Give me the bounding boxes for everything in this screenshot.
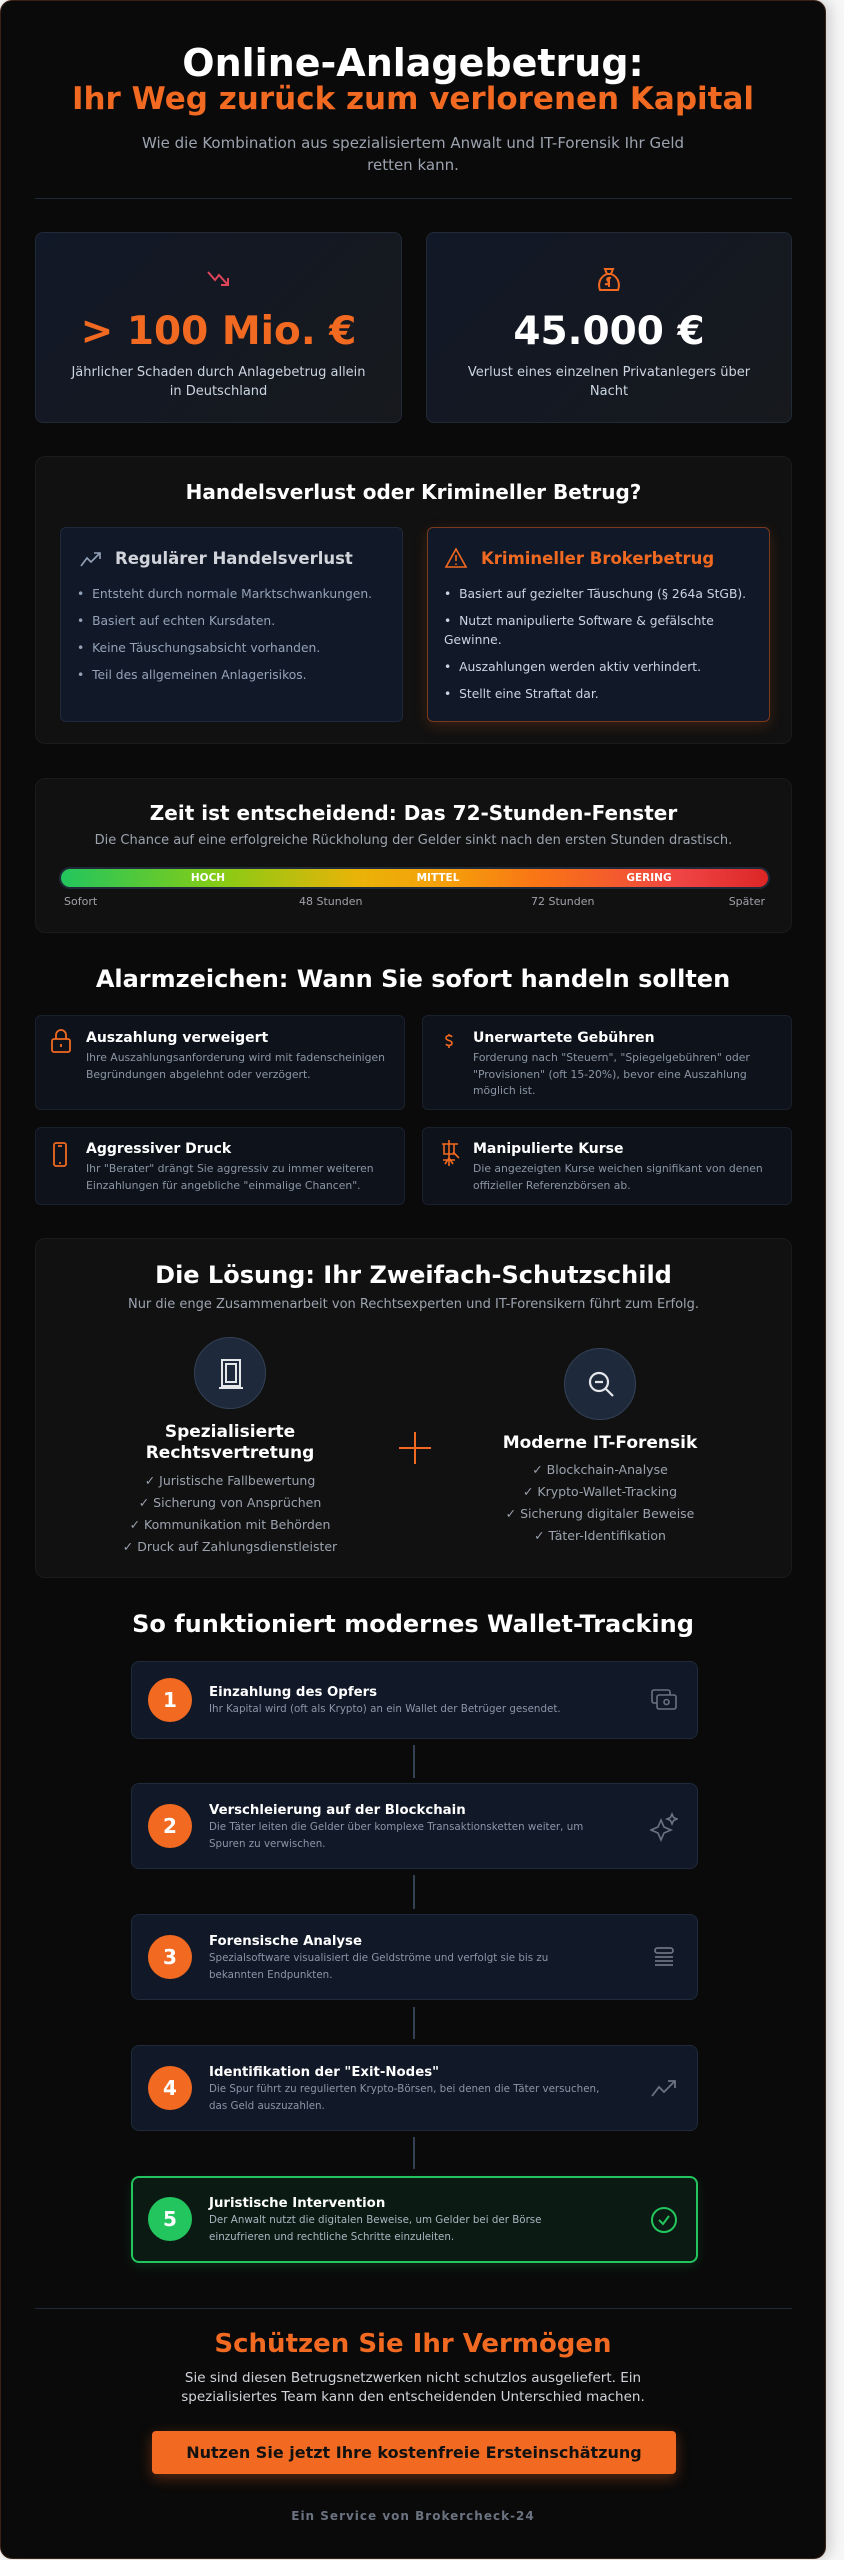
step 5: Juristische Intervention [209, 2196, 385, 2211]
alarm card: manipulated prices: Manipulierte Kurse [473, 1141, 624, 1157]
icon: legal [194, 1337, 266, 1409]
connector [413, 2137, 415, 2169]
column: forensics [503, 1348, 698, 1543]
step 1 [131, 1661, 698, 1739]
CTA text [181, 2370, 645, 2405]
icon: plus [399, 1432, 431, 1464]
subheading: Nur die enge Zusammenarbeit von Rechtsexperten und IT-Forensikern führt zum Erfolg. [128, 1297, 699, 1312]
stat card: individual loss [426, 232, 792, 423]
alarm card: manipulated prices: Die angezeigten Kurse weichen signifikant von denen [473, 1162, 763, 1175]
tick labels: Später [729, 895, 765, 908]
CTA text: Sie sind diesen Betrugsnetzwerken nicht schutzlos ausgeliefert. Ein [185, 2370, 641, 2386]
step 3: Spezialsoftware visualisiert die Geldströme und verfolgt sie bis zu [209, 1952, 548, 1964]
icon: magnifier [564, 1348, 636, 1420]
step 4: das Geld auszuzahlen. [209, 2100, 325, 2112]
alarm card: payout refused: Begründungen abgelehnt oder verzögert. [86, 1068, 311, 1081]
card: regular loss: • Keine Täuschungsabsicht vorhanden. [77, 641, 320, 655]
caption: Nacht [590, 384, 628, 399]
card heading: Regulärer Handelsverlust [115, 549, 353, 568]
step 1: Einzahlung des Opfers [209, 1685, 377, 1700]
step 1: Ihr Kapital wird (oft als Krypto) an ein Wallet der Betrüger gesendet. [209, 1703, 561, 1715]
connector [413, 2007, 415, 2039]
alarm card: pressure [35, 1127, 405, 1205]
column: legal: ✓ Juristische Fallbewertung [145, 1473, 315, 1488]
step 2: Spuren zu verwischen. [209, 1838, 326, 1850]
intro text: Wie die Kombination aus spezialisiertem Anwalt und IT-Forensik Ihr Geld [142, 134, 684, 152]
panel: comparison [35, 456, 792, 744]
intro text [142, 134, 684, 174]
CTA heading: Schützen Sie Ihr Vermögen [214, 2329, 612, 2359]
CTA button [152, 2431, 676, 2474]
tick labels: 72 Stunden [531, 895, 594, 908]
alarm card: fees: Unerwartete Gebühren [473, 1030, 655, 1046]
card: criminal fraud: • Stellt eine Straftat dar. [444, 687, 599, 701]
alarm card: pressure: Aggressiver Druck [86, 1141, 231, 1157]
alarm card: pressure: Ihr "Berater" drängt Sie aggressiv zu immer weiteren [86, 1162, 374, 1175]
panel: 72 hour window [35, 778, 792, 933]
gradient bar [61, 869, 768, 887]
step 3 [131, 1914, 698, 2000]
alarm card: pressure: Einzahlungen für angebliche "einmalige Chancen". [86, 1179, 361, 1192]
CTA text: spezialisiertes Team kann den entscheidenden Unterschied machen. [181, 2389, 645, 2405]
icon: money bag [598, 268, 620, 291]
connector [413, 1875, 415, 1909]
intro text: retten kann. [367, 156, 459, 174]
caption [70, 365, 366, 399]
panel: solution [35, 1238, 792, 1578]
column: forensics: ✓ Sicherung digitaler Beweise [506, 1506, 694, 1521]
alarm card: payout refused: Auszahlung verweigert [86, 1030, 268, 1046]
column: legal: ✓ Druck auf Zahlungsdienstleister [123, 1539, 337, 1554]
gradient bar: MITTEL [417, 872, 459, 884]
title: Online-Anlagebetrug: [182, 41, 644, 85]
gradient bar: GERING [626, 872, 672, 884]
card: regular loss: • Teil des allgemeinen Anlagerisikos. [77, 668, 307, 682]
alarm card: manipulated prices [422, 1127, 792, 1205]
icon: trend down [207, 271, 229, 286]
CTA button: Nutzen Sie jetzt Ihre kostenfreie Ersteinschätzung [186, 2443, 642, 2462]
step 4: Die Spur führt zu regulierten Krypto-Börsen, bei denen die Täter versuchen, [209, 2083, 599, 2095]
column: legal: ✓ Kommunikation mit Behörden [130, 1517, 330, 1532]
card: criminal fraud [427, 527, 770, 722]
caption [468, 365, 750, 399]
heading: Handelsverlust oder Krimineller Betrug? [186, 480, 641, 504]
step 2: 2 [163, 1814, 177, 1838]
alarm card: manipulated prices: offizieller Referenzbörsen ab. [473, 1179, 631, 1192]
heading: Die Lösung: Ihr Zweifach-Schutzschild [155, 1261, 672, 1289]
connector [413, 1745, 415, 1778]
step 2: Verschleierung auf der Blockchain [209, 1803, 466, 1818]
step 3: bekannten Endpunkten. [209, 1969, 332, 1981]
step 2: Die Täter leiten die Gelder über komplexe Transaktionsketten weiter, um [209, 1821, 583, 1833]
card: regular loss: • Basiert auf echten Kursdaten. [77, 614, 275, 628]
caption: in Deutschland [170, 384, 267, 399]
column: legal: Spezialisierte [165, 1422, 295, 1442]
column: legal [123, 1337, 338, 1554]
step 4: Identifikation der "Exit-Nodes" [209, 2065, 439, 2080]
step 3: Forensische Analyse [209, 1934, 362, 1949]
step 1: 1 [163, 1688, 177, 1712]
card: regular loss: • Entsteht durch normale Marktschwankungen. [77, 587, 372, 601]
gradient bar: HOCH [191, 872, 225, 884]
card heading: Krimineller Brokerbetrug [481, 549, 714, 568]
stat card: damage [35, 232, 402, 423]
alarm card: fees: möglich ist. [473, 1084, 535, 1097]
big number: > 100 Mio. € [81, 309, 356, 354]
step 5: Der Anwalt nutzt die digitalen Beweise, um Gelder bei der Börse [209, 2214, 542, 2226]
column: forensics: ✓ Krypto-Wallet-Tracking [523, 1484, 677, 1499]
tick labels: Sofort [64, 895, 97, 908]
card: criminal fraud: • Auszahlungen werden aktiv verhindert. [444, 660, 701, 674]
column: forensics: Moderne IT-Forensik [503, 1433, 697, 1453]
step 4: 4 [163, 2076, 177, 2100]
icon: trend up [80, 552, 101, 566]
subheading: Die Chance auf eine erfolgreiche Rückholung der Gelder sinkt nach den ersten Stunden drastisch. [95, 833, 732, 848]
tick labels: 48 Stunden [299, 895, 362, 908]
alarm card: fees: "Provisionen" (oft 15-20%), bevor eine Auszahlung [473, 1068, 747, 1081]
column: forensics: ✓ Täter-Identifikation [534, 1528, 666, 1543]
alarm card: fees [422, 1015, 792, 1110]
card: criminal fraud: • Basiert auf gezielter Täuschung (§ 264a StGB). [444, 587, 746, 601]
step 5 [131, 2176, 698, 2263]
icon: warning [444, 548, 468, 568]
tick labels [64, 895, 765, 908]
alarm card: fees: Forderung nach "Steuern", "Spiegelgebühren" oder [473, 1051, 750, 1064]
caption: Jährlicher Schaden durch Anlagebetrug allein [71, 365, 366, 380]
step 3: 3 [163, 1945, 177, 1969]
subtitle: Ihr Weg zurück zum verlorenen Kapital [72, 81, 754, 117]
card: criminal fraud: • Nutzt manipulierte Software & gefälschte [444, 614, 714, 628]
alarm card: payout refused [35, 1015, 405, 1110]
alarm card: payout refused: Ihre Auszahlungsanforderung wird mit fadenscheinigen [86, 1051, 385, 1064]
big number: 45.000 € [513, 309, 705, 354]
column: forensics: ✓ Blockchain-Analyse [532, 1462, 668, 1477]
column: legal: ✓ Sicherung von Ansprüchen [139, 1495, 321, 1510]
step 2 [131, 1783, 698, 1869]
card: criminal fraud: Gewinne. [444, 633, 502, 647]
step 4 [131, 2045, 698, 2131]
card: regular loss [60, 527, 403, 722]
step 5: einzufrieren und rechtliche Schritte einzuleiten. [209, 2231, 454, 2243]
heading: Zeit ist entscheidend: Das 72-Stunden-Fenster [150, 801, 677, 825]
footer: Ein Service von Brokercheck-24 [291, 2509, 535, 2523]
heading: alarm signs: Alarmzeichen: Wann Sie sofort handeln sollten [96, 965, 730, 993]
heading: wallet tracking: So funktioniert modernes Wallet-Tracking [132, 1610, 694, 1638]
caption: Verlust eines einzelnen Privatanlegers über [468, 365, 750, 380]
step 5: 5 [163, 2207, 177, 2231]
column: legal: Rechtsvertretung [146, 1443, 314, 1463]
